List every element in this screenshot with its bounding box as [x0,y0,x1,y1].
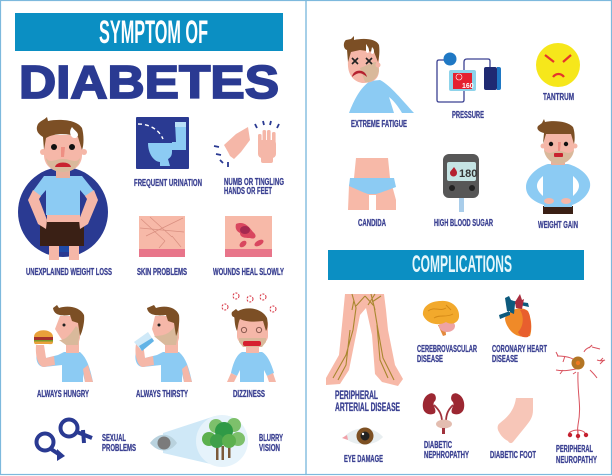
label: DISEASE [492,354,518,365]
illustration: legs with arteries [326,294,403,386]
illustration: unexplained weight loss man [18,117,108,260]
title banner: symptom of: SYMPTOM OF [99,14,208,50]
illustration: extreme fatigue man [344,36,414,113]
label [102,433,136,454]
icon: blurry vision [150,415,248,467]
label: EXTREME FATIGUE [351,119,407,130]
label: FREQUENT URINATION [134,178,202,189]
label: SEXUAL [102,433,126,444]
label: PRESSURE [452,110,484,121]
label [424,440,469,461]
icon: neuron [556,345,605,440]
icon: toilet [136,117,189,169]
label: DIABETIC [424,440,452,451]
icon: glucose meter [443,154,479,212]
label [492,344,547,365]
label [417,344,477,365]
label: PERIPHERAL [335,390,378,402]
label: NEPHROPATHY [424,450,469,461]
label: WEIGHT GAIN [538,220,578,231]
icon: wounds [225,216,272,257]
label: DIABETIC FOOT [490,450,536,461]
illustration: candida [348,158,396,210]
label [224,177,284,197]
label: WOUNDS HEAL SLOWLY [213,267,284,278]
title banner: symptom of [15,13,283,51]
label: BLURRY [259,433,283,444]
icon: heart [499,294,531,337]
icon: foot [498,398,533,443]
icon: gender symbols [36,420,92,461]
label: DIZZINESS [233,389,265,400]
label: DISEASE [417,354,443,365]
banner: complications: COMPLICATIONS [412,251,512,278]
icon: blood pressure monitor [437,52,501,102]
label: HANDS OR FEET [224,186,272,197]
label: ALWAYS HUNGRY [37,389,89,400]
label [335,390,400,414]
icon: skin problems [139,216,185,257]
icon: eye [342,428,383,444]
label: VISION [259,443,280,454]
label [259,433,283,454]
icon: glucose meter: 180 [459,168,477,180]
label: SKIN PROBLEMS [137,267,187,278]
icon: kidneys [423,393,464,434]
label: HIGH BLOOD SUGAR [434,218,493,229]
banner: complications [328,250,584,280]
icon: numb hands [214,121,279,167]
label [556,444,597,466]
label: TANTRUM [543,92,574,103]
illustration: always thirsty man [134,305,192,382]
label: EYE DAMAGE [344,454,383,465]
label: CANDIDA [358,218,386,229]
icon: angry face [536,43,580,87]
label: CEREBROVASCULAR [417,344,477,355]
label: PROBLEMS [102,443,136,454]
illustration: weight gain man [526,119,590,214]
illustration: always hungry man [34,305,93,382]
label: UNEXPLAINED WEIGHT LOSS [26,267,112,278]
icon: blood pressure monitor: 160 [462,83,474,90]
label: ALWAYS THIRSTY [136,389,188,400]
title: diabetes: DIABETES [19,56,279,108]
icon: brain [423,301,459,336]
label: CORONARY HEART [492,344,547,355]
label: NUMB OR TINGLING [224,177,284,188]
illustration: dizziness man [222,293,276,382]
label: ARTERIAL DISEASE [335,402,400,414]
